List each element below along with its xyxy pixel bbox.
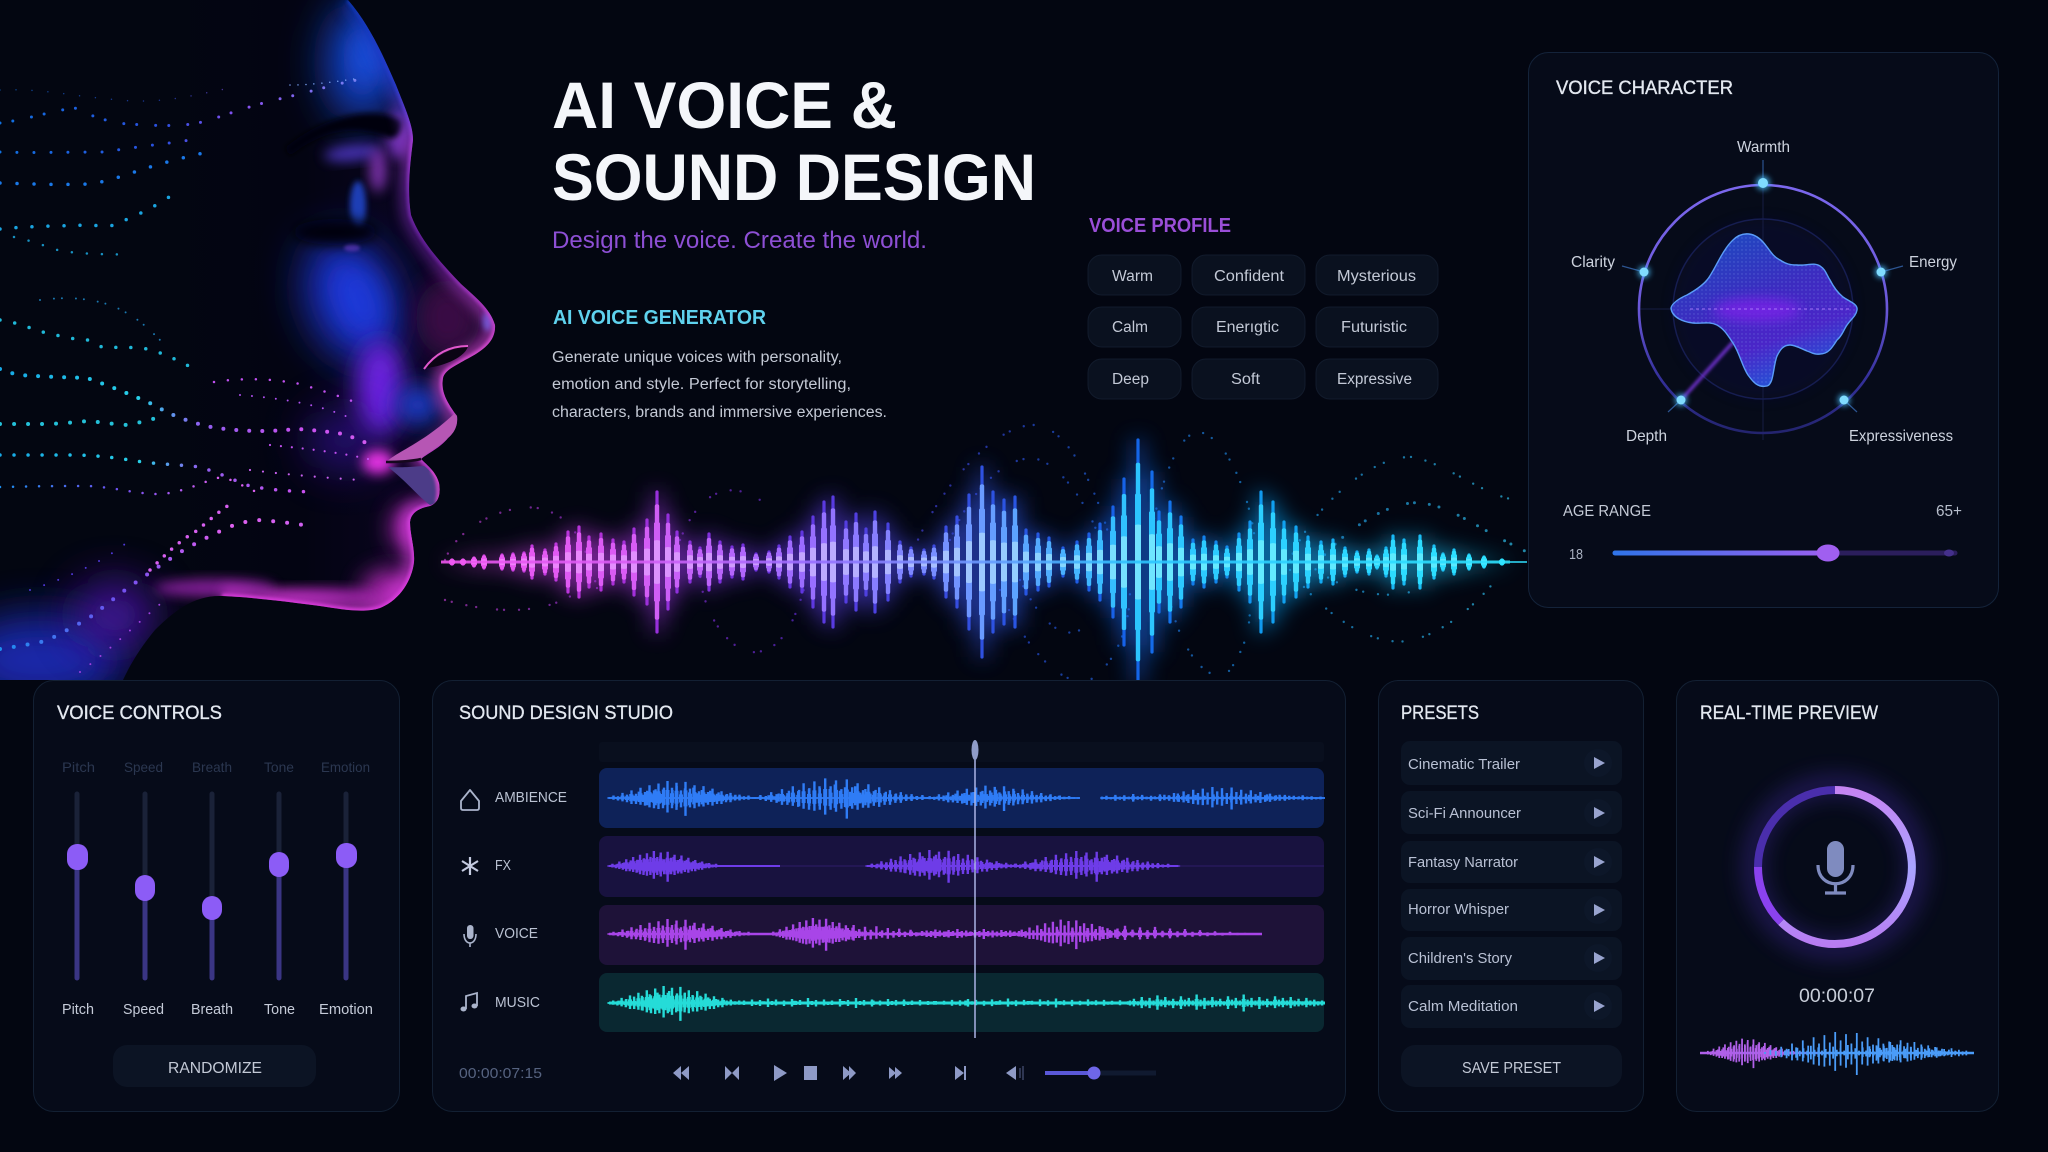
track label: fx: [462, 857, 511, 875]
track: voice waveform: [609, 918, 1262, 951]
preset row: horror whisper: [1401, 889, 1622, 931]
subtitle: Design the voice. Create the world.: [552, 227, 927, 254]
track: music waveform: [609, 986, 1325, 1021]
timecode: 00:00:07:15: [459, 1065, 542, 1082]
axis labels: [1571, 139, 1957, 445]
progress ring: [1753, 785, 1917, 949]
track: fx waveform: [609, 850, 1324, 883]
particle streams flowing from the head: [0, 78, 375, 672]
panel: presets: [1378, 680, 1644, 1112]
tag labels: Futuristic: [1341, 319, 1407, 336]
preset row: fantasy narrator: [1401, 841, 1622, 883]
axis labels: Warmth: [1737, 139, 1790, 156]
title: SOUND DESIGN: [552, 140, 1036, 214]
slider labels: Emotion: [319, 1001, 373, 1018]
heading: real-time preview: REAL-TIME PREVIEW: [1700, 703, 1878, 724]
track label: voice: [464, 925, 538, 947]
slider labels: Speed: [123, 1001, 164, 1018]
age range slider: [1563, 503, 1962, 563]
tag labels: Mysterious: [1337, 268, 1416, 285]
tag labels: Expressive: [1337, 371, 1412, 388]
title: AI VOICE &: [552, 68, 897, 142]
heading: voice character: VOICE CHARACTER: [1556, 77, 1733, 99]
faint top slider labels: Emotion: [321, 759, 370, 775]
track label: voice: VOICE: [495, 926, 538, 942]
panel: voice profile tags: [1088, 215, 1438, 399]
timeline strip: [599, 742, 1324, 762]
radar chart with voice blob: [1571, 139, 1957, 445]
panel: sound design studio: [432, 680, 1346, 1112]
age range slider: 65+: [1936, 503, 1962, 520]
age range slider: 18: [1569, 546, 1583, 563]
tag chips: [1088, 255, 1438, 399]
portrait: face in profile: [0, 0, 520, 705]
axis labels: Expressiveness: [1849, 428, 1953, 445]
tag labels: [1112, 268, 1416, 388]
preset row: calm meditation: [1401, 985, 1622, 1028]
icon: nostril: [424, 346, 468, 369]
panel: real-time preview: [1676, 680, 1998, 1112]
waveform centre line: [415, 559, 1527, 565]
axis labels: Clarity: [1571, 254, 1615, 271]
slider labels: Pitch: [62, 1001, 94, 1018]
faint top slider labels: [62, 759, 370, 775]
axis labels: Depth: [1626, 428, 1667, 445]
faint top slider labels: Tone: [264, 759, 294, 775]
track: ambience waveform: [609, 778, 1325, 819]
heading: sound design studio: SOUND DESIGN STUDIO: [459, 703, 673, 724]
faint top slider labels: Breath: [192, 759, 232, 775]
transport controls: [673, 1065, 1023, 1081]
track label: ambience: AMBIENCE: [495, 790, 567, 806]
faint top slider labels: Pitch: [62, 759, 95, 775]
faint top slider labels: Speed: [124, 759, 163, 775]
age range slider: AGE RANGE: [1563, 503, 1651, 520]
panel: voice character: [1528, 52, 1998, 608]
slider labels: Tone: [264, 1001, 295, 1018]
tag labels: Deep: [1112, 371, 1149, 388]
slider labels: [62, 1001, 373, 1018]
tag labels: Soft: [1231, 371, 1261, 388]
description text: characters, brands and immersive experiences.: [552, 404, 887, 421]
main voice waveform with particle lobes: [415, 425, 1527, 684]
description text: emotion and style. Perfect for storytelling,: [552, 376, 851, 393]
heading: presets: PRESETS: [1401, 703, 1479, 724]
preset row: fantasy narrator: Fantasy Narrator: [1408, 855, 1518, 871]
randomize button: [113, 1045, 316, 1087]
save preset button: SAVE PRESET: [1462, 1060, 1561, 1077]
tag labels: Enerıgtic: [1216, 319, 1279, 336]
tag labels: Confident: [1214, 268, 1285, 285]
preset row: horror whisper: Horror Whisper: [1408, 902, 1509, 918]
icon: microphone: [1818, 841, 1853, 893]
heading: AI voice generator: AI VOICE GENERATOR: [553, 307, 767, 329]
preset row: sci-fi announcer: [1401, 791, 1622, 834]
description text: Generate unique voices with personality,: [552, 349, 842, 366]
voice blob: [1671, 234, 1857, 386]
track label: music: MUSIC: [495, 995, 540, 1011]
track label: ambience: [461, 790, 567, 810]
preset row: sci-fi announcer: Sci-Fi Announcer: [1408, 806, 1521, 822]
heading: voice controls: VOICE CONTROLS: [57, 703, 222, 724]
track label: fx: FX: [495, 858, 511, 874]
track backgrounds: [599, 768, 1324, 1032]
dotted lobes around the waveform: [445, 425, 1527, 681]
preview timecode: 00:00:07: [1799, 986, 1875, 1007]
preset row: children's story: Children's Story: [1408, 951, 1513, 967]
playhead: [972, 740, 978, 1038]
preview waveform: [1700, 1032, 1974, 1075]
tag labels: Warm: [1112, 268, 1153, 285]
track label: music: [460, 993, 540, 1012]
panel: voice controls: [34, 680, 400, 1112]
title: [552, 68, 1036, 214]
description text: [552, 349, 887, 421]
axis labels: Energy: [1909, 254, 1957, 271]
waveform bars: [452, 440, 1502, 684]
preset row: children's story: [1401, 937, 1622, 980]
preset row: calm meditation: Calm Meditation: [1408, 999, 1518, 1015]
slider labels: Breath: [191, 1001, 233, 1018]
preset row: cinematic trailer: Cinematic Trailer: [1408, 757, 1520, 773]
randomize button: RANDOMIZE: [168, 1060, 262, 1077]
volume slider: [1045, 1066, 1156, 1080]
preset row: cinematic trailer: [1401, 741, 1622, 785]
sliders: [67, 794, 357, 978]
save preset button: [1401, 1045, 1622, 1087]
tag labels: Calm: [1112, 319, 1148, 336]
heading: voice profile: VOICE PROFILE: [1089, 215, 1231, 237]
axis points: [1622, 160, 1903, 412]
waveform glow: [452, 440, 1502, 684]
